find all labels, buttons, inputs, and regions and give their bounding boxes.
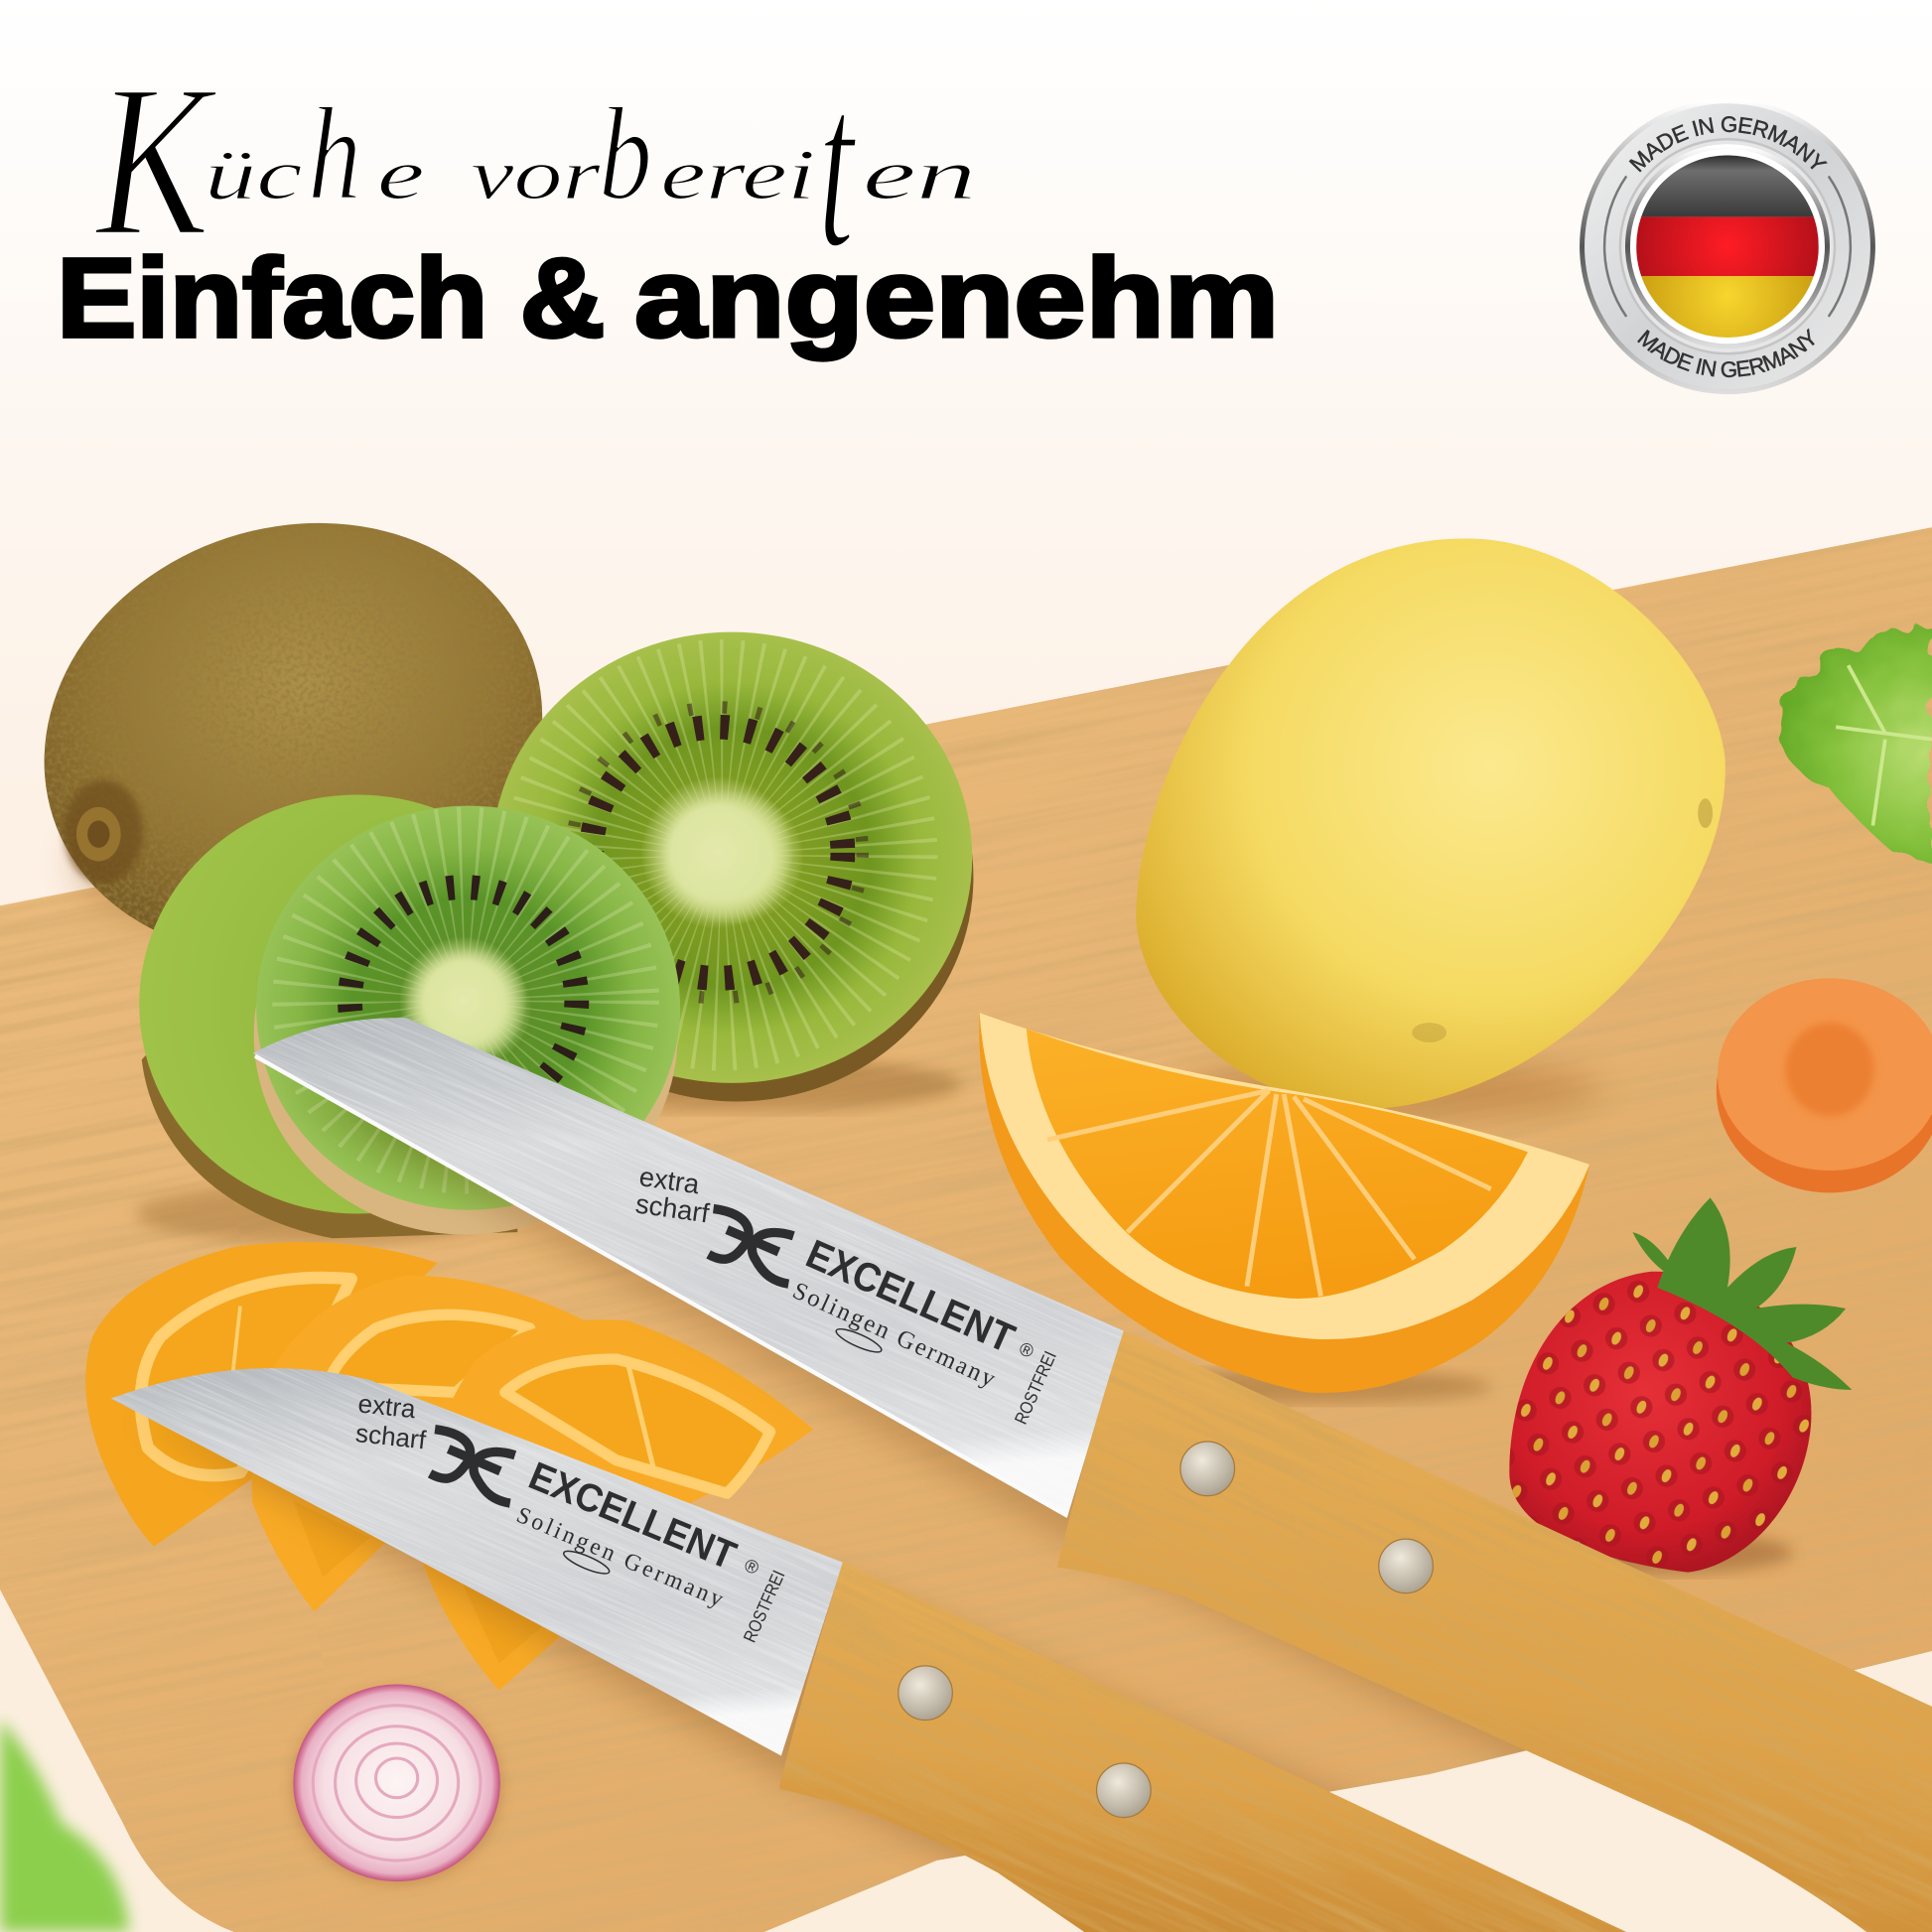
- title bold: Einfach: [57, 235, 487, 360]
- knife two engraving: ROSTFREI: [740, 1568, 788, 1645]
- shadow: [323, 1100, 1526, 1758]
- shadow: [167, 1429, 1348, 1861]
- knife one engraving: extra: [637, 1161, 702, 1199]
- badge text bottom: MADE IN GERMANY: [1637, 328, 1815, 377]
- knife two engraving: EXCELLENT: [522, 1453, 742, 1579]
- title bold: angenehm: [634, 235, 1279, 360]
- title script: vor: [471, 134, 601, 214]
- slice two: [251, 1276, 586, 1611]
- kiwi half back: [491, 632, 973, 1111]
- knife two engraving: scharf: [354, 1418, 428, 1455]
- title script: K: [93, 38, 217, 282]
- handle: [1057, 1330, 1932, 1932]
- badge: made in germany: [1580, 103, 1875, 394]
- title script: erei: [660, 136, 815, 214]
- knife two engraving: Solingen Germany: [512, 1502, 727, 1612]
- title script: h: [308, 81, 361, 228]
- onion slice: [293, 1685, 500, 1882]
- cutting board: [0, 527, 1932, 1932]
- blade edge: [255, 1056, 1067, 1516]
- title script: üc: [205, 135, 303, 214]
- title script: e: [377, 134, 425, 214]
- slice one: [85, 1242, 438, 1547]
- title bold: [57, 235, 1279, 360]
- title script: [93, 38, 977, 297]
- orange slices: [85, 1242, 813, 1691]
- knife one engraving: ®: [1017, 1337, 1037, 1362]
- title script: t: [818, 38, 857, 297]
- knife one engraving: scharf: [633, 1187, 712, 1229]
- title bold: &: [520, 235, 605, 360]
- knife two engraving: extra: [356, 1388, 418, 1424]
- lettuce bottom left: [0, 1719, 129, 1932]
- blade: [111, 1368, 843, 1756]
- flag: [1636, 155, 1819, 338]
- large orange wedge: [979, 1013, 1589, 1404]
- knife two engraving: [354, 1388, 788, 1645]
- whole kiwi: [44, 522, 542, 935]
- lettuce right: [1779, 622, 1932, 863]
- knife one engraving: ROSTFREI: [1011, 1348, 1060, 1428]
- title script: en: [863, 135, 977, 214]
- carrot slice: [1717, 978, 1932, 1192]
- badge text top: MADE IN GERMANY: [1628, 116, 1828, 173]
- strawberry: [1503, 1197, 1852, 1578]
- knife two: [111, 1368, 1651, 1932]
- slice three: [416, 1319, 813, 1691]
- rivets: [898, 1666, 1151, 1818]
- knife one: [252, 1018, 1932, 1932]
- rivets: [1180, 1442, 1433, 1593]
- knife one engraving: EXCELLENT: [800, 1230, 1022, 1361]
- title script: b: [599, 81, 652, 228]
- knife two engraving: ®: [742, 1554, 762, 1579]
- knife one engraving: Solingen Germany: [788, 1277, 1000, 1393]
- blade: [252, 1018, 1124, 1518]
- handle: [778, 1563, 1626, 1932]
- potato: [1136, 538, 1725, 1120]
- knife one engraving: [633, 1161, 1060, 1428]
- kiwi half left: [136, 794, 576, 1243]
- kiwi slice front: [254, 806, 680, 1235]
